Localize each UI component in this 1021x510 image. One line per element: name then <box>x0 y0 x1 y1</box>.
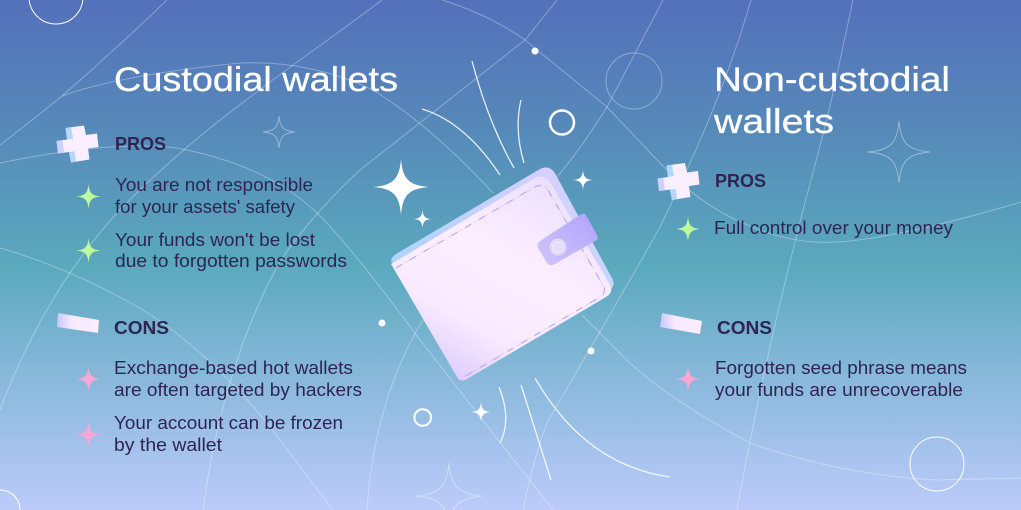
heading: pros: PROS <box>115 133 166 154</box>
wallet clasp <box>537 214 598 265</box>
text: con 1: Exchange-based hot wallets <box>114 357 353 378</box>
text: con 1: are often targeted by hackers <box>114 379 362 400</box>
motion lines <box>422 61 670 480</box>
wallet button <box>550 239 566 255</box>
wallet <box>391 167 614 381</box>
text: pro 2 <box>115 229 347 271</box>
text: con 2: by the wallet <box>114 434 222 455</box>
text: pro 1: for your assets' safety <box>115 196 296 217</box>
title <box>713 61 950 141</box>
panel: custodial wallets <box>56 61 398 455</box>
icon: green sparkle <box>76 238 101 263</box>
text: pro 2: Your funds won't be lost <box>115 229 315 250</box>
wallet front <box>391 177 611 381</box>
text: pro 1: You are not responsible <box>115 174 313 195</box>
wallet stitching <box>396 185 604 377</box>
text: con 2 <box>114 412 343 455</box>
icon: minus <box>660 313 702 334</box>
text: con 1 <box>114 357 362 400</box>
text: con 1 <box>715 357 967 400</box>
title: Custodial wallets <box>114 61 398 99</box>
text: con 1: your funds are unrecoverable <box>715 379 963 400</box>
text: pro 1: Full control over your money <box>714 217 954 238</box>
faint outline sparkles <box>263 116 930 510</box>
white sparkles <box>373 159 593 422</box>
text: pro 2: due to forgotten passwords <box>115 250 347 271</box>
icon: pink sparkle <box>76 366 101 392</box>
wallet back cover <box>391 167 614 300</box>
text: con 2: Your account can be frozen <box>114 412 343 433</box>
dots <box>378 48 594 354</box>
title: wallets <box>713 103 834 141</box>
icon: green sparkle <box>676 216 700 242</box>
icon: plus <box>56 126 98 162</box>
icon: minus <box>57 313 99 333</box>
panel: non-custodial wallets <box>658 61 967 400</box>
icon: pink sparkle <box>676 366 700 392</box>
icon: plus <box>658 163 700 200</box>
heading: pros: PROS <box>715 170 766 191</box>
text: pro 1 <box>115 174 313 217</box>
heading: cons: CONS <box>114 317 169 338</box>
heading: cons: CONS <box>717 317 772 338</box>
title: Non-custodial <box>714 61 950 99</box>
text: con 1: Forgotten seed phrase means <box>715 357 967 378</box>
icon: green sparkle <box>76 184 101 209</box>
icon: pink sparkle <box>76 422 101 447</box>
